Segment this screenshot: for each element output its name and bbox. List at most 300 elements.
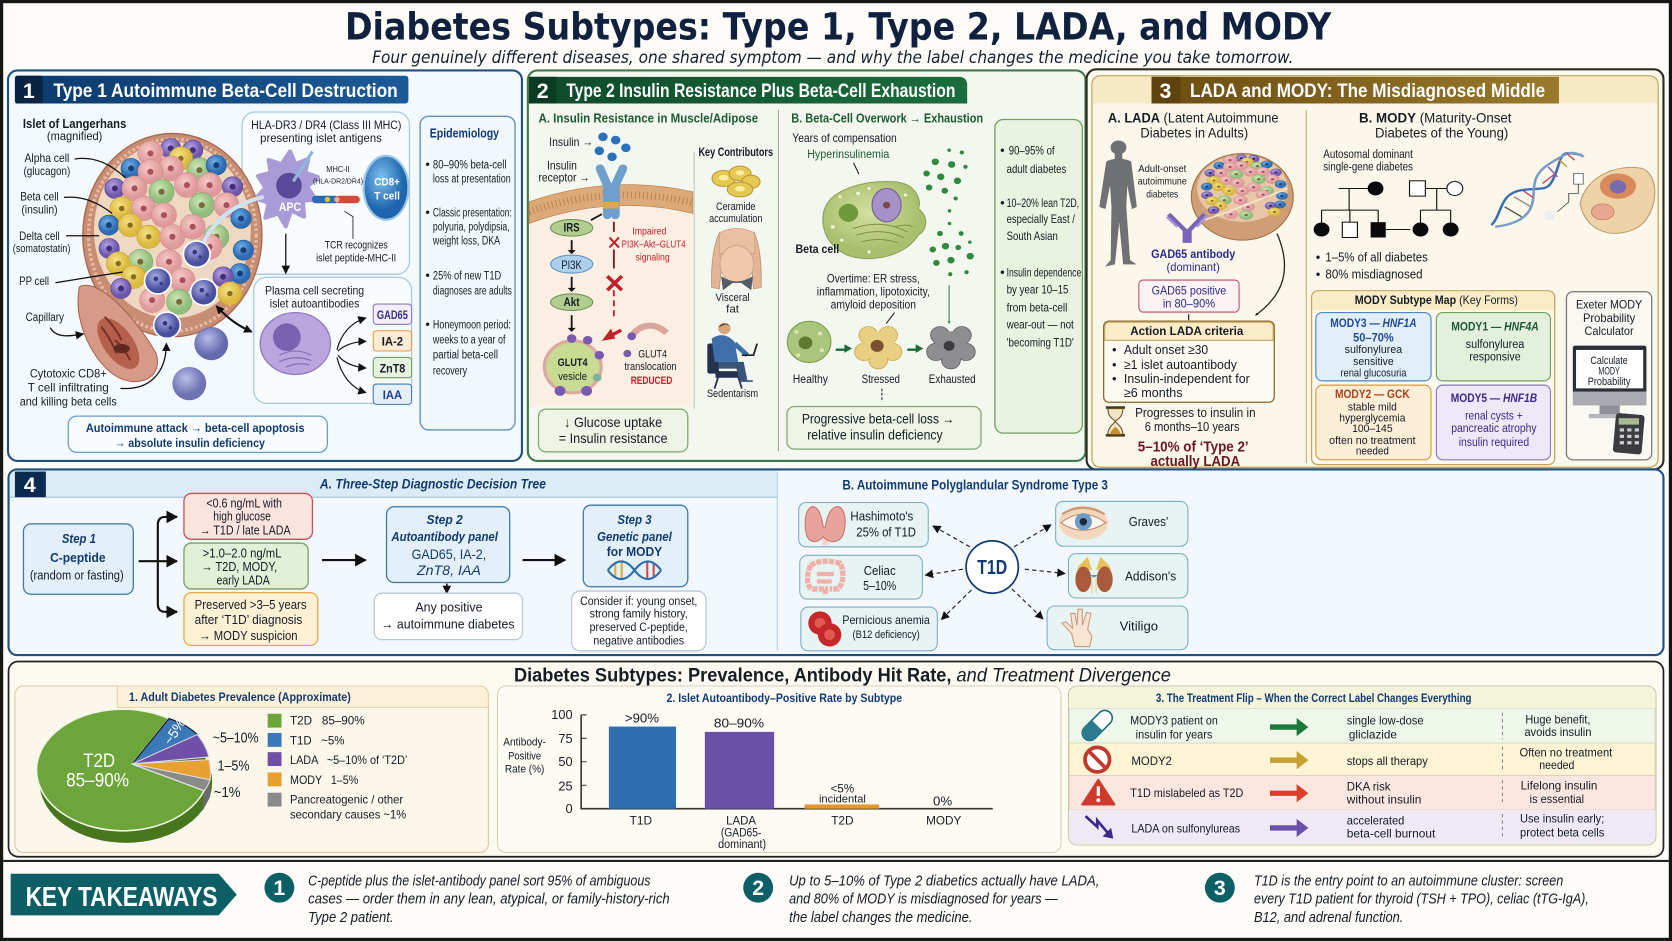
beta cell <box>823 182 926 259</box>
row: LADA on sulfonylureas <box>1070 810 1655 844</box>
takeaway 1: 1 <box>273 876 285 900</box>
box: Exeter MODY calculator: Probability <box>1583 311 1636 325</box>
box: consider if <box>572 591 706 651</box>
torso <box>712 233 761 289</box>
box: consider if: strong family history, <box>590 608 688 621</box>
panel 3 header: LADA and MODY: The Misdiagnosed Middle <box>1190 81 1545 102</box>
islet labels: (magnified) <box>47 129 102 143</box>
callout: progressive beta-cell loss <box>787 406 981 449</box>
pie legend: LADA ~5–10% of ‘T2D’ <box>290 753 407 767</box>
MODY2: MODY2 — GCK <box>1335 387 1410 401</box>
box: epidemiology <box>420 116 515 430</box>
row: T1D mislabeled <box>1070 776 1655 810</box>
bar value labels: <5% <box>831 782 854 796</box>
cell <box>1580 167 1655 233</box>
MODY1: responsive <box>1469 351 1521 364</box>
panel 2 header: 2 <box>537 79 549 103</box>
box: epidemiology: Epidemiology <box>430 126 499 141</box>
box: Exeter MODY calculator: Probability <box>1588 376 1631 388</box>
box: HLA antigen presentation: HLA-DR3 / DR4 (Class III MHC) <box>251 118 401 132</box>
pie callouts: ~5–10% <box>213 730 259 747</box>
row: MODY3: gliclazide <box>1349 727 1397 741</box>
box: type 2 facts: 'becoming T1D' <box>1007 336 1074 350</box>
box: type 2 facts: from beta-cell <box>1007 301 1067 315</box>
box: Action LADA criteria: Action LADA criteria <box>1130 324 1244 338</box>
box: step 2: ZnT8, IAA <box>416 562 481 578</box>
row: LADA on sulfonylureas: protect beta cells <box>1520 825 1604 839</box>
heading: LADA: Diabetes in Adults) <box>1140 125 1248 141</box>
illustrations: LADA figure, islet, pedigree, DNA, cell <box>1100 140 1655 320</box>
box: HLA antigen presentation: (HLA-DR2/DR4) <box>313 177 364 186</box>
pie legend: MODY 1–5% <box>290 773 358 787</box>
icon: hourglass <box>1106 408 1125 435</box>
box: Action LADA criteria: Insulin-independent for <box>1124 371 1250 386</box>
box: type 2 facts: especially East / <box>1007 212 1075 226</box>
panel 2: Type 2 <box>528 70 1086 461</box>
MODY subtype map <box>1312 291 1555 465</box>
number 4: 4 <box>24 473 36 497</box>
pathway labels: PI3K–Akt–GLUT4 <box>622 240 686 251</box>
row: MODY3: avoids insulin <box>1524 725 1592 739</box>
box: consider if: negative antibodies <box>593 634 684 647</box>
pathway labels: IRS <box>564 221 580 235</box>
antibody tags <box>373 304 412 404</box>
arrow: step 2 down <box>446 584 448 593</box>
takeaway 2: 2 <box>752 876 764 900</box>
MODY2: needed <box>1356 445 1389 457</box>
LADA progression text: 6 months–10 years <box>1145 419 1240 434</box>
MODY2: often no treatment <box>1329 435 1416 447</box>
chart 2: antibody bar chart: Positive <box>508 751 541 763</box>
box: consider if: Consider if: young onset, <box>580 595 697 608</box>
row: LADA on sulfonylureas: beta-cell burnout <box>1347 827 1436 841</box>
box: preserved C-peptide: → MODY suspicion <box>199 628 298 643</box>
chart 1: prevalence pie <box>15 686 488 852</box>
row: MODY3: insulin for years <box>1136 727 1212 741</box>
box: HLA antigen presentation: islet peptide-MHC-II <box>316 252 396 264</box>
callout: glucose uptake: ↓ Glucose uptake <box>564 414 662 430</box>
heading: MODY: Diabetes of the Young) <box>1375 125 1508 141</box>
antibody tags: IA-2 <box>382 335 403 349</box>
box: HLA antigen presentation: T cell <box>374 191 400 203</box>
card: Celiac: 5–10% <box>863 578 896 593</box>
MODY5: MODY5 — HNF1B <box>1451 391 1537 405</box>
beta-cell labels: Exhausted <box>929 372 976 386</box>
LADA labels: GAD65 antibody <box>1151 247 1235 261</box>
box: Action LADA criteria: • <box>1112 343 1116 357</box>
card: Hashimoto's: 25% of T1D <box>856 525 916 540</box>
chart 2: antibody bar chart: 2. Islet Autoantibody–Positive Rate by Subtype <box>666 691 902 705</box>
box: step 3: Step 3 <box>617 512 652 527</box>
row: MODY2: stops all therapy <box>1347 754 1429 768</box>
box: step 2: Step 2 <box>427 512 463 527</box>
bar value labels: incidental <box>819 793 866 805</box>
heading: MODY <box>1359 110 1512 141</box>
MODY2: 100–145 <box>1352 423 1393 435</box>
arrow: to step 2 <box>322 559 366 561</box>
box: epidemiology: partial beta-cell <box>433 348 498 361</box>
DNA <box>1491 153 1584 227</box>
box: epidemiology: weeks to a year of <box>432 334 506 347</box>
box: type 2 facts: wear-out — not <box>1006 318 1074 332</box>
islet labels: (glucagon) <box>23 164 70 178</box>
box: epidemiology: 80–90% beta-cell <box>433 159 507 172</box>
card: Addison's: Addison's <box>1125 568 1176 583</box>
icon: DNA <box>608 561 661 579</box>
MODY3: sulfonylurea <box>1345 344 1403 356</box>
pie: T2D <box>83 751 115 772</box>
pie legend: Pancreatogenic / other <box>290 792 403 806</box>
LADA labels: Adult-onset <box>1138 164 1186 175</box>
callout: progressive beta-cell loss: relative insulin deficiency <box>807 427 943 443</box>
pathway labels: REDUCED <box>631 375 672 387</box>
bar value labels: >90% <box>625 710 659 725</box>
LADA labels: (dominant) <box>1167 260 1220 274</box>
key contributors: Visceral <box>716 292 750 304</box>
box: epidemiology: Honeymoon period: <box>433 319 511 332</box>
panel 2 header: Type 2 Insulin Resistance Plus Beta-Cell Exhaustion <box>566 81 955 102</box>
box: any positive <box>374 593 522 640</box>
number 4 <box>15 472 46 497</box>
key contributors: fat <box>726 304 740 316</box>
key contributors <box>698 146 773 400</box>
MODY genetics text: Autosomal dominant <box>1323 148 1413 161</box>
row: MODY2 <box>1070 743 1655 776</box>
box: plasma cell and autoantibodies: Plasma cell secreting <box>265 283 364 297</box>
panel 5: data charts <box>9 661 1663 857</box>
card: Celiac <box>800 555 922 599</box>
MODY5: insulin required <box>1459 436 1529 449</box>
pathway labels: receptor → <box>538 170 590 184</box>
takeaway 3: B12, and adrenal function. <box>1254 909 1403 926</box>
table 3: treatment flip: 3. The Treatment Flip – When the Correct Label Changes Everything <box>1156 691 1472 705</box>
section heading: Diabetes Subtypes: Prevalence, Antibody Hit Rate, and Treatment Divergence <box>514 666 1171 687</box>
illustration: islet of Langerhans <box>78 133 264 400</box>
MODY2: hyperglycemia <box>1339 412 1406 424</box>
box: type 2 facts: Insulin dependence <box>1007 265 1081 279</box>
illustration: insulin signaling pathway <box>529 132 975 407</box>
box: epidemiology: polyuria, polydipsia, <box>433 220 510 233</box>
pie legend: T1D ~5% <box>290 734 345 748</box>
arrow: to step 3 <box>522 559 565 561</box>
beta-cell labels: Healthy <box>793 372 829 386</box>
bar value labels: 0% <box>933 794 952 809</box>
beta-cell labels <box>792 131 976 386</box>
row: MODY3: MODY3 patient on <box>1130 713 1218 727</box>
row: T1D mislabeled: T1D mislabeled as T2D <box>1130 786 1243 800</box>
panel 2 header <box>529 77 967 103</box>
box: Action LADA criteria: • <box>1112 372 1116 386</box>
box: epidemiology: loss at presentation <box>433 172 511 185</box>
ceramide <box>712 166 760 197</box>
row: LADA on sulfonylureas: Use insulin early; <box>1520 812 1604 826</box>
row: MODY3: Huge benefit, <box>1525 712 1590 726</box>
MODY2 <box>1316 385 1431 460</box>
MODY genetics text: single-gene diabetes <box>1323 161 1413 174</box>
pathway labels: GLUT4 <box>638 348 667 360</box>
box: type 2 facts: 90–95% of <box>1009 144 1055 158</box>
box: HLA antigen presentation: CD8+ <box>374 177 400 189</box>
heading: LADA: A. LADA (Latent Autoimmune <box>1108 110 1279 126</box>
LADA progression text: 5–10% of ‘Type 2’ <box>1138 438 1249 455</box>
box: type 2 facts: adult diabetes <box>1007 162 1066 176</box>
box: low C-peptide: high glucose <box>213 509 271 524</box>
takeaway 3 <box>1205 873 1589 926</box>
islet labels: Beta cell <box>20 190 59 204</box>
chart 2: antibody bar chart <box>497 686 1061 852</box>
box: Exeter MODY calculator: Exeter MODY <box>1576 297 1642 311</box>
pathway labels: GLUT4 <box>558 357 588 369</box>
pie callouts <box>213 730 259 801</box>
chart 2: antibody bar chart: Rate (%) <box>505 763 545 775</box>
key contributors: Ceramide <box>716 201 755 213</box>
MODY genetics text <box>1316 148 1428 281</box>
beta-cell labels: Years of compensation <box>792 131 897 145</box>
sedentary person <box>707 344 719 374</box>
MODY genetics text: 1–5% of all diabetes <box>1325 249 1428 264</box>
LADA labels: autoimmune <box>1138 177 1187 188</box>
box: epidemiology: weight loss, DKA <box>432 234 500 247</box>
box: epidemiology: • <box>425 158 430 172</box>
pie legend: secondary causes ~1% <box>290 807 406 821</box>
box: epidemiology: Classic presentation: <box>433 207 512 220</box>
box: GAD65 positive: GAD65 positive <box>1152 283 1226 297</box>
MODY1 <box>1436 313 1550 381</box>
takeaway 2: the label changes the medicine. <box>789 909 972 926</box>
bar axis labels: T1D <box>630 814 652 828</box>
heading: MODY: B. MODY (Maturity-Onset <box>1359 110 1512 126</box>
box: step 1: (random or fasting) <box>30 567 124 582</box>
box: any positive: → autoimmune diabetes <box>381 616 515 631</box>
box: Action LADA criteria: Adult onset ≥30 <box>1124 342 1208 357</box>
islet labels: (somatostatin) <box>13 243 70 255</box>
takeaway 2: Up to 5–10% of Type 2 diabetics actually have LADA, <box>789 873 1099 890</box>
box: type 2 facts: 10–20% lean T2D, <box>1007 196 1079 210</box>
panel 1: Type 1 <box>8 70 522 461</box>
beta-cell labels: Hyperinsulinemia <box>807 147 889 161</box>
card: Pernicious anemia <box>801 607 937 651</box>
card: Celiac: Celiac <box>864 563 896 578</box>
box: plasma cell and autoantibodies <box>254 277 412 404</box>
takeaway 1: Type 2 patient. <box>308 909 393 926</box>
callout: glucose uptake: = Insulin resistance <box>559 430 668 446</box>
panel 4: diagnostics and APS <box>9 469 1663 655</box>
key contributors: accumulation <box>709 213 762 225</box>
MODY genetics text: • <box>1316 250 1320 264</box>
box: mid C-peptide: → T2D, MODY, <box>202 559 277 574</box>
MODY1: MODY1 — HNF4A <box>1451 320 1539 334</box>
beta-cell labels: inflammation, lipotoxicity, <box>817 285 930 299</box>
takeaway 3: every T1D patient for thyroid (TSH + TPO), celiac (tTG-IgA), <box>1254 891 1589 908</box>
box: plasma cell and autoantibodies: islet autoantibodies <box>270 296 359 310</box>
box: consider if: preserved C-peptide, <box>590 621 688 634</box>
box: type 2 facts: South Asian <box>1007 229 1058 243</box>
LADA progression text: actually LADA <box>1151 453 1240 470</box>
MODY2: stable mild <box>1348 402 1397 414</box>
beta-cell labels: amyloid deposition <box>831 297 916 311</box>
islet labels: T cell infiltrating <box>28 381 109 395</box>
pie legend: T2D 85–90% <box>290 713 365 727</box>
chart 2: antibody bar chart: 25 <box>558 779 573 794</box>
box: mid C-peptide: >1.0–2.0 ng/mL <box>203 545 282 560</box>
panel 3 header <box>1093 77 1657 103</box>
box: HLA antigen presentation <box>242 112 409 274</box>
islet labels: Capillary <box>26 310 65 324</box>
takeaway 2 <box>743 873 1099 926</box>
row: MODY2: needed <box>1539 758 1575 772</box>
box: type 2 facts: • <box>1000 144 1005 158</box>
panel 3 header: 3 <box>1160 79 1172 103</box>
card: Hashimoto's <box>799 503 928 547</box>
title: Diabetes Subtypes: Type 1, Type 2, LADA, and MODY <box>345 4 1332 48</box>
chart 2: antibody bar chart: 0 <box>566 801 573 816</box>
islet labels: PP cell <box>19 274 49 288</box>
islet labels: (insulin) <box>21 202 58 216</box>
box: GAD65 positive: in 80–90% <box>1163 296 1215 310</box>
box: epidemiology: recovery <box>433 364 467 377</box>
MODY subtype map: MODY Subtype Map (Key Forms) <box>1355 293 1518 307</box>
box: type 2 facts: • <box>1000 196 1005 210</box>
bar value labels <box>625 710 952 809</box>
pathway labels: vesicle <box>558 371 587 383</box>
MODY3: MODY3 — HNF1A <box>1330 316 1417 330</box>
MODY5 <box>1436 385 1550 460</box>
box: Exeter MODY calculator: MODY <box>1598 365 1620 377</box>
card: Addison's <box>1068 554 1188 598</box>
LADA progression text: Progresses to insulin in <box>1135 405 1256 420</box>
key contributors: Sedentarism <box>707 388 758 400</box>
row: MODY3 <box>1070 707 1655 744</box>
box: epidemiology: • <box>425 269 430 283</box>
panel 1 header: Type 1 Autoimmune Beta-Cell Destruction <box>53 81 398 102</box>
box: mid C-peptide <box>184 543 308 589</box>
card: Hashimoto's: Hashimoto's <box>850 509 913 524</box>
heading B: APS type 3: B. Autoimmune Polyglandular Syndrome Type 3 <box>842 477 1108 493</box>
box: Action LADA criteria: ≥6 months <box>1124 385 1183 400</box>
box: step 1: C-peptide <box>50 550 106 565</box>
MODY genetics text: 80% misdiagnosed <box>1325 266 1422 281</box>
card: Graves' <box>1056 501 1188 546</box>
T1D hub with dashed arrows: T1D <box>977 557 1007 579</box>
row: MODY3: single low-dose <box>1347 713 1424 727</box>
chart 2: antibody bar chart: Antibody- <box>503 737 546 749</box>
bar axis labels: LADA <box>726 814 757 828</box>
row: T1D mislabeled: without insulin <box>1346 792 1422 806</box>
MODY genetics text: • <box>1316 267 1320 281</box>
MODY3 <box>1316 313 1431 381</box>
chart 2: antibody bar chart: 75 <box>558 731 573 746</box>
chart 2: antibody bar chart: 100 <box>551 707 573 722</box>
box: preserved C-peptide <box>184 593 318 645</box>
row: T1D mislabeled: Lifelong insulin <box>1521 778 1598 793</box>
bar value labels: 80–90% <box>714 716 764 731</box>
islet labels: Alpha cell <box>25 151 69 165</box>
chart 2: antibody bar chart: 50 <box>558 754 573 769</box>
LADA labels <box>1138 164 1235 274</box>
row: MODY2: Often no treatment <box>1520 745 1613 759</box>
box: step 3: Genetic panel <box>597 529 672 544</box>
takeaway 3: 3 <box>1214 876 1226 900</box>
box: preserved C-peptide: Preserved >3–5 years <box>195 597 307 612</box>
box: step 1 <box>23 524 133 594</box>
branching arrows <box>139 517 177 612</box>
pathway labels: Akt <box>564 295 580 309</box>
box: Exeter MODY calculator <box>1566 292 1652 460</box>
key takeaways banner: KEY TAKEAWAYS <box>26 881 218 912</box>
pie <box>37 709 212 843</box>
box: step 2: GAD65, IA-2, <box>412 546 486 562</box>
pathway labels: Insulin <box>547 159 577 173</box>
MODY3: 50–70% <box>1353 330 1394 344</box>
MODY5: pancreatic atrophy <box>1451 422 1537 435</box>
callout: autoimmune attack: → absolute insulin deficiency <box>115 436 265 450</box>
key takeaways banner <box>11 874 237 915</box>
panel 1 header: 1 <box>23 79 35 103</box>
pathway labels: signaling <box>636 252 670 263</box>
pie: ~5% <box>160 715 188 748</box>
T1D hub with dashed arrows <box>926 525 1065 619</box>
beta-cell labels: Stressed <box>862 372 900 386</box>
heading B: B. Beta-Cell Overwork → Exhaustion <box>791 111 983 126</box>
box: GAD65 positive <box>1139 280 1239 312</box>
card: Graves': Graves' <box>1129 514 1168 529</box>
bar axis labels <box>630 814 961 851</box>
bar axis labels: (GAD65- <box>721 826 761 839</box>
box: type 2 facts: • <box>1000 265 1005 279</box>
pie callouts: 1–5% <box>218 757 250 774</box>
box: Action LADA criteria: • <box>1112 358 1116 372</box>
row: LADA on sulfonylureas: LADA on sulfonylureas <box>1131 822 1240 836</box>
box: HLA antigen presentation: APC <box>279 201 302 214</box>
callout: autoimmune attack: Autoimmune attack → beta-cell apoptosis <box>86 421 305 435</box>
box: type 2 facts: by year 10–15 <box>1007 282 1069 296</box>
box: Exeter MODY calculator: Calculate <box>1590 355 1628 367</box>
islet labels: Delta cell <box>19 229 60 243</box>
heading A: decision tree: A. Three-Step Diagnostic Decision Tree <box>319 476 546 492</box>
key contributors: Key Contributors <box>698 146 773 159</box>
table 3: treatment flip <box>1068 686 1656 845</box>
bar axis labels: dominant) <box>718 838 766 851</box>
islet labels <box>13 116 166 408</box>
box: Exeter MODY calculator: Calculator <box>1585 324 1634 338</box>
islet labels: Islet of Langerhans <box>23 116 126 131</box>
box: step 2 <box>387 507 510 583</box>
box: epidemiology: • <box>425 318 430 332</box>
takeaway 3: T1D is the entry point to an autoimmune cluster: screen <box>1254 873 1563 890</box>
pie legend <box>268 713 407 821</box>
takeaway 2: and 80% of MODY is misdiagnosed for years — <box>789 891 1059 908</box>
box: HLA antigen presentation: MHC-II <box>326 164 350 174</box>
arrow: APC to plasma cell <box>285 234 287 273</box>
beta-cell labels: Beta cell <box>795 242 839 256</box>
pathway labels: Impaired <box>632 227 666 238</box>
box: step 3: for MODY <box>607 544 662 559</box>
pathway labels: Insulin → <box>549 135 593 149</box>
pedigree <box>1322 181 1463 237</box>
pathway labels: PI3K <box>561 258 582 272</box>
callout: glucose uptake <box>538 409 688 452</box>
callout: autoimmune attack <box>68 416 327 452</box>
box: low C-peptide <box>184 493 312 539</box>
MODY3: sensitive <box>1353 356 1394 368</box>
box: low C-peptide: → T1D / late LADA <box>200 523 291 538</box>
pathway labels <box>538 135 686 387</box>
bars <box>609 727 879 809</box>
three stage cells <box>787 321 831 363</box>
box: any positive: Any positive <box>415 599 483 614</box>
row: T1D mislabeled: is essential <box>1530 792 1584 806</box>
box: HLA antigen presentation: presenting islet antigens <box>260 131 382 145</box>
